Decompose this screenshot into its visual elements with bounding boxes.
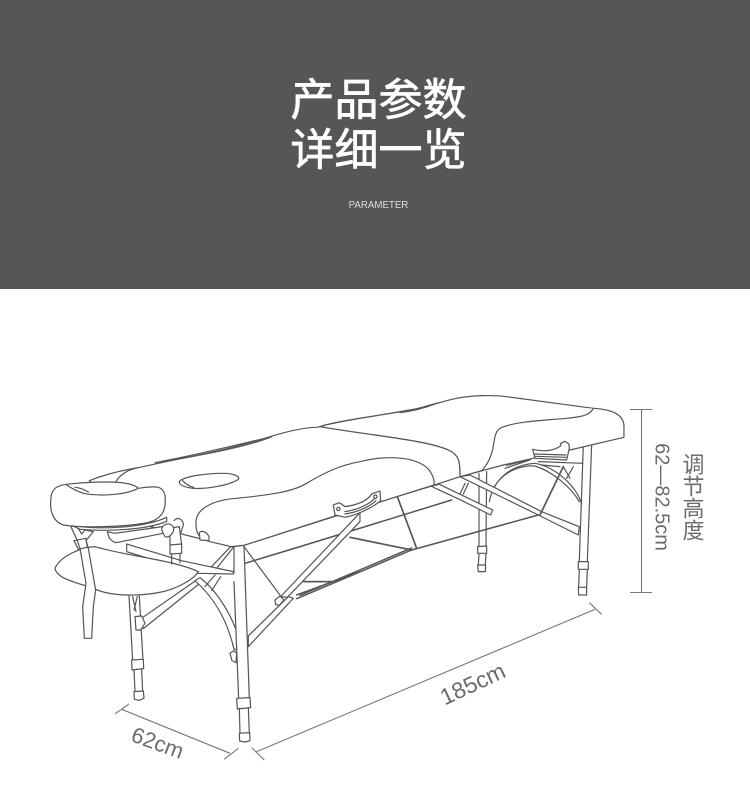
carry handle rear [533, 441, 569, 460]
face hole [179, 473, 239, 488]
width value: 62cm [128, 722, 187, 764]
lower leg segments [132, 659, 251, 742]
header panel [0, 0, 750, 289]
subtitle: PARAMETER [349, 200, 408, 211]
armrest sling [55, 547, 198, 595]
length dimension line [252, 603, 602, 760]
length value: 185cm [436, 657, 509, 710]
width dimension line [115, 704, 238, 759]
front flap [196, 458, 434, 547]
head mattress pad [89, 427, 460, 547]
title line 2: 详细一览 [290, 126, 466, 175]
hanging strap [71, 526, 96, 638]
back mattress pad [320, 396, 624, 477]
height value: 62—82.5cm [650, 443, 672, 551]
height dimension line [630, 410, 652, 592]
title line 1: 产品参数 [290, 76, 466, 125]
near frame legs and braces [127, 513, 360, 698]
height label: 调节高度 [680, 453, 704, 541]
face cradle [51, 482, 183, 564]
carry handle front [333, 491, 381, 517]
far side frame [245, 445, 592, 599]
